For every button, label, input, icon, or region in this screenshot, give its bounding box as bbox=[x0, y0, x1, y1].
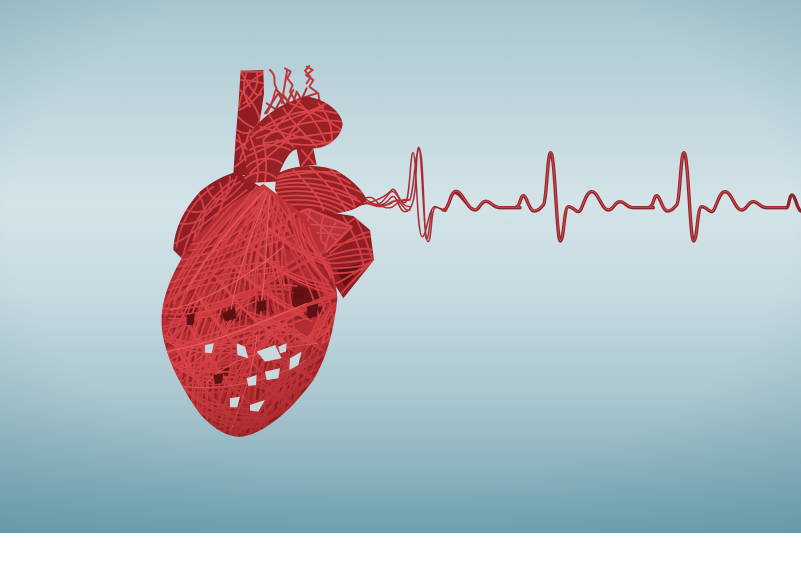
dark interior behind the strands bbox=[183, 267, 323, 390]
ventricle wire strands bbox=[162, 185, 338, 437]
ECG red highlight bbox=[443, 152, 787, 241]
small gaps between strands: dark interior bbox=[187, 288, 318, 384]
right atrium bbox=[299, 208, 374, 298]
heart bbox=[150, 66, 410, 443]
ECG dark body bbox=[443, 153, 801, 241]
aortic arch bbox=[243, 97, 343, 183]
ECG trace bbox=[360, 147, 801, 242]
small gaps between strands: pale backdrop bbox=[205, 343, 302, 412]
left atrium bbox=[173, 172, 260, 260]
wires joining the heart to the ECG bbox=[347, 187, 410, 210]
superior vessel bbox=[233, 70, 264, 175]
ventricle body bbox=[162, 184, 338, 437]
vessel wisps at the top bbox=[265, 66, 320, 120]
pulmonary artery bbox=[275, 166, 367, 217]
ECG tangled first beat bbox=[360, 147, 447, 242]
